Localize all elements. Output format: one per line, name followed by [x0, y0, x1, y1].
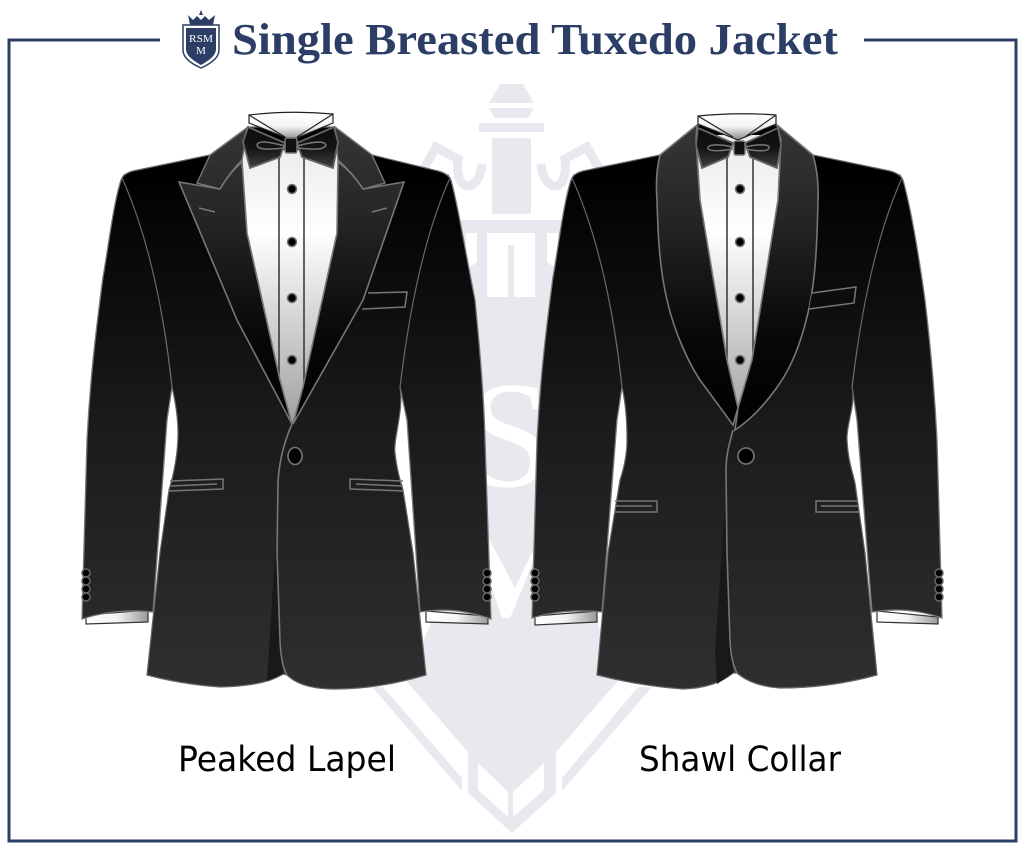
upper collar left — [197, 127, 248, 189]
upper collar right — [335, 127, 385, 189]
title logo: M — [196, 45, 206, 57]
shawl lapel right — [735, 125, 818, 430]
jacket: peaked lapel — [82, 112, 491, 689]
title logo — [183, 10, 219, 68]
left hip pocket — [614, 501, 657, 512]
lapel buttonhole marks — [199, 208, 387, 212]
placket lines — [727, 158, 753, 370]
front closure line — [277, 424, 292, 675]
peaked lapel left — [179, 162, 292, 424]
jacket button — [288, 448, 302, 464]
watermark shield logo — [372, 84, 652, 833]
front hem shadow — [715, 503, 733, 684]
front closure line — [726, 430, 737, 673]
jacket: shawl collar — [531, 114, 943, 689]
shirt collar — [249, 112, 333, 140]
shirt studs — [736, 184, 744, 364]
jacket body — [572, 125, 902, 689]
right hip pocket — [816, 501, 859, 512]
right cuff buttons — [483, 569, 491, 601]
label: peaked lapel: Peaked Lapel — [178, 740, 396, 780]
right cuff — [426, 611, 488, 624]
left sleeve — [532, 175, 622, 618]
left cuff buttons — [531, 569, 539, 601]
front hem shadow — [267, 520, 283, 681]
title logo: RSM — [189, 33, 213, 45]
shirt front — [697, 135, 781, 410]
bow tie — [243, 127, 338, 168]
shirt studs — [288, 184, 296, 364]
left hip pocket — [169, 479, 223, 491]
right cuff buttons — [935, 569, 943, 601]
right hip pocket — [350, 479, 404, 491]
shirt front — [242, 150, 338, 424]
right cuff — [877, 611, 938, 624]
chest pocket — [362, 292, 407, 309]
label: shawl collar: Shawl Collar — [639, 740, 842, 780]
left cuff — [535, 611, 597, 625]
right sleeve — [400, 175, 491, 619]
bow tie — [696, 128, 781, 168]
title: Single Breasted Tuxedo Jacket — [232, 15, 838, 64]
watermark shield logo: S — [468, 351, 552, 519]
left cuff buttons — [82, 569, 90, 601]
shirt collar — [698, 114, 776, 140]
chest pocket — [809, 287, 856, 309]
left cuff — [86, 610, 148, 624]
right sleeve — [852, 175, 942, 618]
placket lines — [279, 158, 304, 392]
jacket body — [122, 127, 450, 689]
jacket button — [738, 448, 754, 464]
shawl lapel left — [656, 125, 738, 425]
left sleeve — [82, 175, 172, 619]
peaked lapel right — [293, 162, 404, 424]
